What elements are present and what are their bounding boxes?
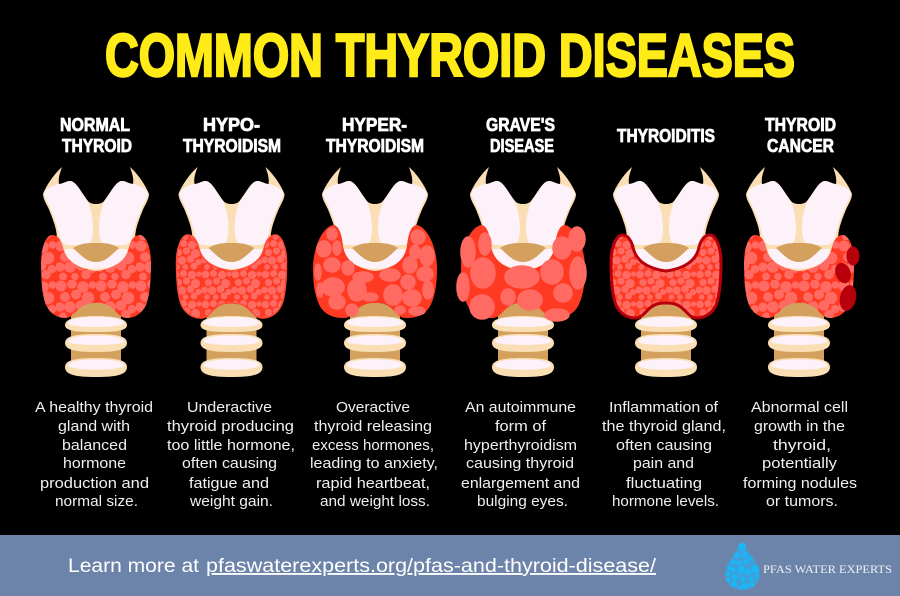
heading: hyperthyroidism [326, 115, 424, 156]
heading: hyperthyroidism: HYPER- [342, 115, 407, 135]
heading: grave's disease: DISEASE [490, 136, 554, 156]
description: hyperthyroidism: Overactive [336, 400, 410, 416]
description: thyroiditis: Inflammation of [609, 400, 719, 416]
heading: hypothyroidism: THYROIDISM [183, 136, 281, 156]
illustration: grave's disease [457, 167, 586, 377]
description: hyperthyroidism [310, 400, 438, 510]
description: thyroid cancer: growth in the [754, 419, 845, 435]
description: hyperthyroidism: thyroid releasing [314, 419, 432, 435]
heading: grave's disease: GRAVE'S [486, 115, 555, 135]
description: thyroiditis: pain and [633, 456, 694, 472]
description: hyperthyroidism: rapid heartbeat, [316, 476, 430, 492]
heading: grave's disease [486, 115, 555, 156]
panel: thyroiditis [602, 126, 726, 510]
description: thyroiditis: fluctuating [626, 476, 702, 492]
description: hypothyroidism [167, 400, 295, 510]
heading: thyroid cancer: THYROID [765, 115, 836, 135]
description: grave's disease: hyperthyroidism [464, 438, 577, 454]
description: hypothyroidism: fatigue and [189, 476, 269, 492]
description: thyroiditis: often causing [616, 438, 712, 454]
description: grave's disease: form of [495, 419, 547, 435]
description: grave's disease: causing thyroid [466, 456, 574, 472]
description: thyroiditis: the thyroid gland, [602, 419, 726, 435]
description: normal thyroid: hormone [63, 456, 126, 472]
heading: thyroid cancer: CANCER [767, 136, 834, 156]
description: grave's disease: enlargement and [461, 476, 580, 492]
logo wordmark: PFAS WATER EXPERTS [763, 562, 892, 576]
illustration: hyperthyroidism [313, 167, 437, 377]
panel: grave's disease [457, 115, 586, 510]
illustration: thyroid cancer [744, 167, 860, 377]
footer banner [0, 535, 900, 596]
description: thyroid cancer: Abnormal cell [751, 400, 848, 416]
description: thyroid cancer [743, 400, 857, 510]
description: grave's disease [461, 400, 580, 510]
description: hyperthyroidism: excess hormones, [312, 438, 434, 454]
heading: thyroiditis: THYROIDITIS [617, 126, 715, 146]
heading: normal thyroid [60, 115, 132, 156]
description: thyroid cancer: or tumors. [766, 494, 838, 510]
description: hypothyroidism: weight gain. [189, 494, 273, 510]
heading: hyperthyroidism: THYROIDISM [326, 136, 424, 156]
heading: hypothyroidism [183, 115, 281, 156]
call to action: Learn more at [68, 556, 200, 577]
description: normal thyroid: A healthy thyroid [35, 400, 153, 416]
description: normal thyroid [35, 400, 153, 510]
call to action: pfaswaterexperts.org/pfas-and-thyroid-disease/ [206, 556, 657, 577]
description: thyroiditis: hormone levels. [612, 494, 719, 510]
description: thyroid cancer: potentially [762, 456, 838, 472]
description: normal thyroid: balanced [62, 438, 127, 454]
description: hyperthyroidism: leading to anxiety, [310, 456, 438, 472]
description: hyperthyroidism: and weight loss. [320, 494, 430, 510]
panel: thyroid cancer [743, 115, 860, 510]
panel: hyperthyroidism [310, 115, 438, 510]
description: grave's disease: An autoimmune [465, 400, 576, 416]
description: hypothyroidism: Underactive [187, 400, 272, 416]
illustration: normal thyroid [41, 167, 151, 377]
panel: normal thyroid [35, 115, 153, 510]
description: grave's disease: bulging eyes. [477, 494, 568, 510]
heading: normal thyroid: THYROID [62, 136, 132, 156]
panel: hypothyroidism [167, 115, 295, 510]
description: thyroid cancer: thyroid, [773, 438, 831, 454]
description: normal thyroid: normal size. [55, 494, 138, 510]
illustration: thyroiditis [611, 167, 721, 377]
description: thyroid cancer: forming nodules [743, 476, 857, 492]
heading: thyroid cancer [765, 115, 836, 156]
icon: water drop logo [725, 541, 760, 590]
description: normal thyroid: production and [40, 476, 149, 492]
heading: hypothyroidism: HYPO- [203, 115, 260, 135]
heading: normal thyroid: NORMAL [60, 115, 130, 135]
description: normal thyroid: gland with [58, 419, 130, 435]
illustration: hypothyroidism [176, 167, 286, 377]
description: thyroiditis [602, 400, 726, 510]
description: hypothyroidism: too little hormone, [167, 438, 295, 454]
description: hypothyroidism: often causing [182, 456, 277, 472]
description: hypothyroidism: thyroid producing [167, 419, 294, 435]
